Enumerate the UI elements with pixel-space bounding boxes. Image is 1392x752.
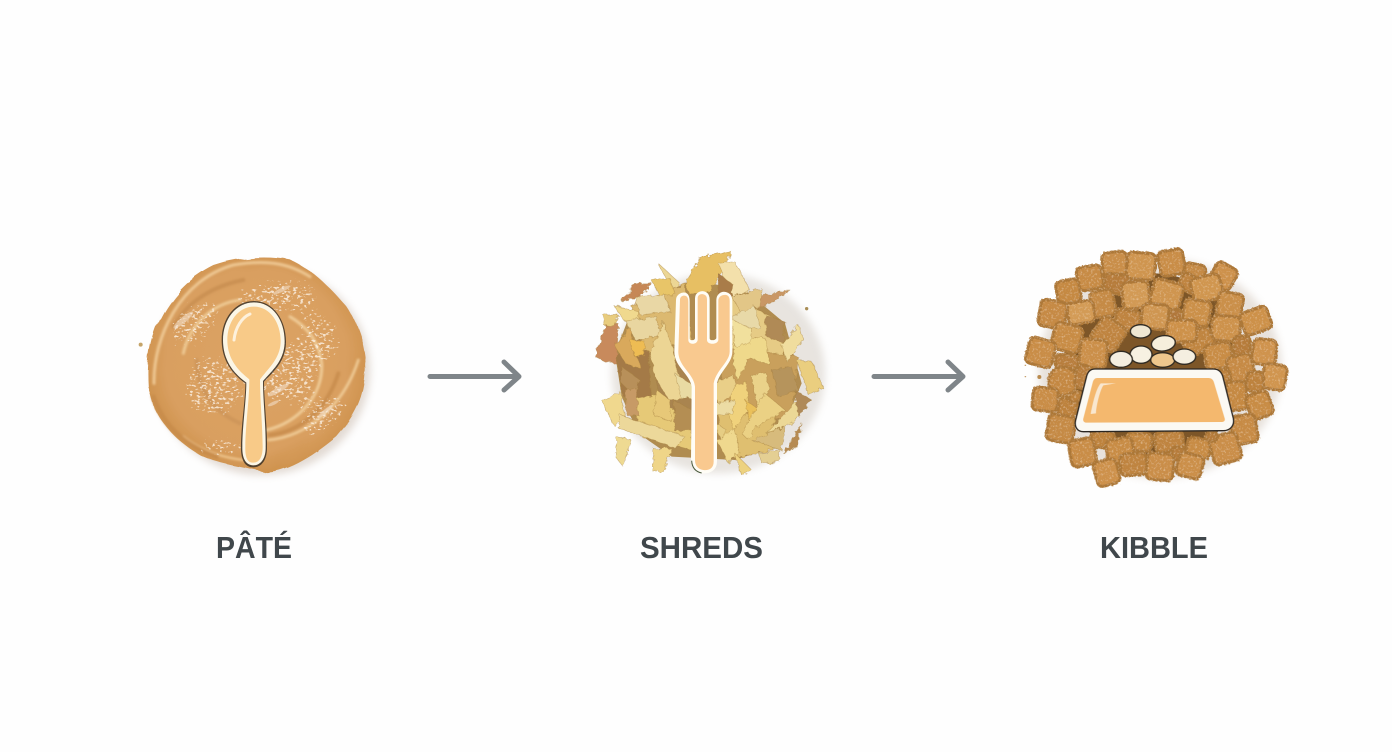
pate swirl ridges [153, 262, 358, 460]
icon: fork [675, 292, 732, 473]
kibble shadow [1038, 258, 1282, 478]
label: shreds: SHREDS [640, 530, 763, 565]
label: pate: PÂTÉ [216, 529, 292, 565]
kibble dark base [1063, 273, 1243, 460]
pate glossy speckles [150, 269, 364, 462]
shreds shadow [612, 273, 825, 473]
pate glossy streaks [172, 284, 334, 420]
icon: bowl [1075, 369, 1234, 432]
shreds base [615, 280, 802, 460]
kibble pieces [1024, 248, 1288, 488]
shredded pieces under layer [615, 283, 798, 460]
panel: shreds [595, 252, 825, 475]
crumb [139, 343, 143, 347]
crumbs [1025, 365, 1041, 379]
shredded pieces [595, 252, 823, 475]
pate shadow [153, 265, 370, 475]
panel: kibble [1024, 248, 1288, 488]
label: kibble: KIBBLE [1100, 530, 1208, 565]
icon: kibble stones [1110, 325, 1196, 367]
icon: spoon [222, 301, 286, 467]
arrow: pate to shreds [430, 362, 519, 390]
pate blob [148, 257, 365, 473]
panel: pate [139, 257, 370, 475]
arrow: shreds to kibble [874, 362, 963, 390]
crumb [805, 307, 808, 310]
